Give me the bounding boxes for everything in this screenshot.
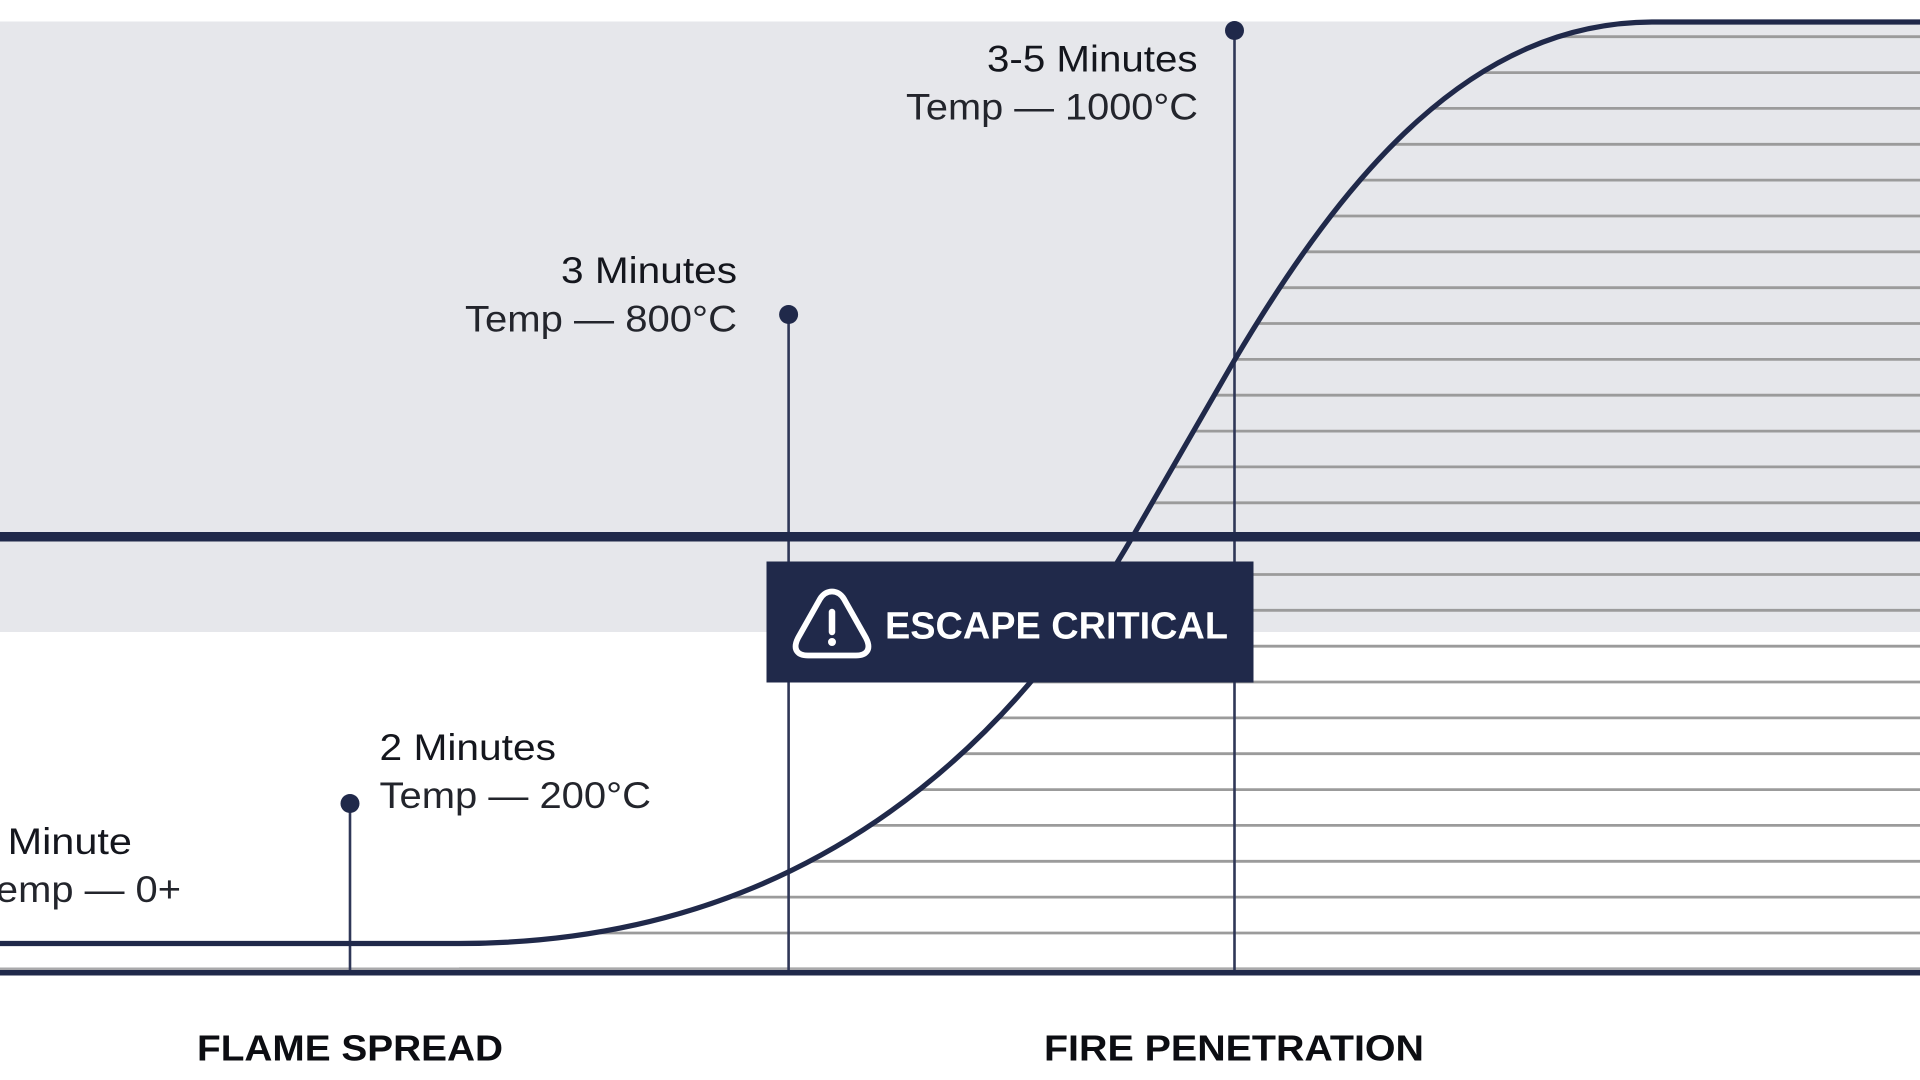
time marker stems (350, 30, 1234, 973)
label: 3-5 minutes: Temp — 1000°C (906, 86, 1198, 128)
hatched area under curve (459, 35, 1920, 968)
label: 2 minutes (380, 727, 651, 816)
label: 1 minute (0, 821, 181, 910)
grey danger band (0, 22, 1920, 632)
marker dot: 3-5 minutes (1225, 21, 1244, 40)
callout: escape critical (766, 562, 1254, 682)
grey line above baseline (0, 968, 1920, 970)
marker dot: 3 minutes (779, 305, 798, 324)
chart baseline (0, 970, 1920, 976)
label: 3-5 minutes: 3-5 Minutes (987, 38, 1198, 80)
marker dot: 2 minutes (340, 794, 360, 813)
axis label: fire penetration: FIRE PENETRATION (1044, 1028, 1424, 1068)
axis label: flame spread: FLAME SPREAD (197, 1028, 503, 1068)
label: 2 minutes: Temp — 200°C (380, 775, 651, 816)
label: 3 minutes: Temp — 800°C (465, 298, 737, 340)
label: 3 minutes: 3 Minutes (561, 250, 737, 291)
critical threshold line (0, 532, 1920, 542)
callout: escape critical: ESCAPE CRITICAL (885, 606, 1228, 648)
icon: warning triangle (796, 592, 868, 656)
label: 2 minutes: 2 Minutes (380, 727, 556, 768)
label: 3-5 minutes (906, 38, 1198, 128)
label: 3 minutes (465, 250, 737, 340)
